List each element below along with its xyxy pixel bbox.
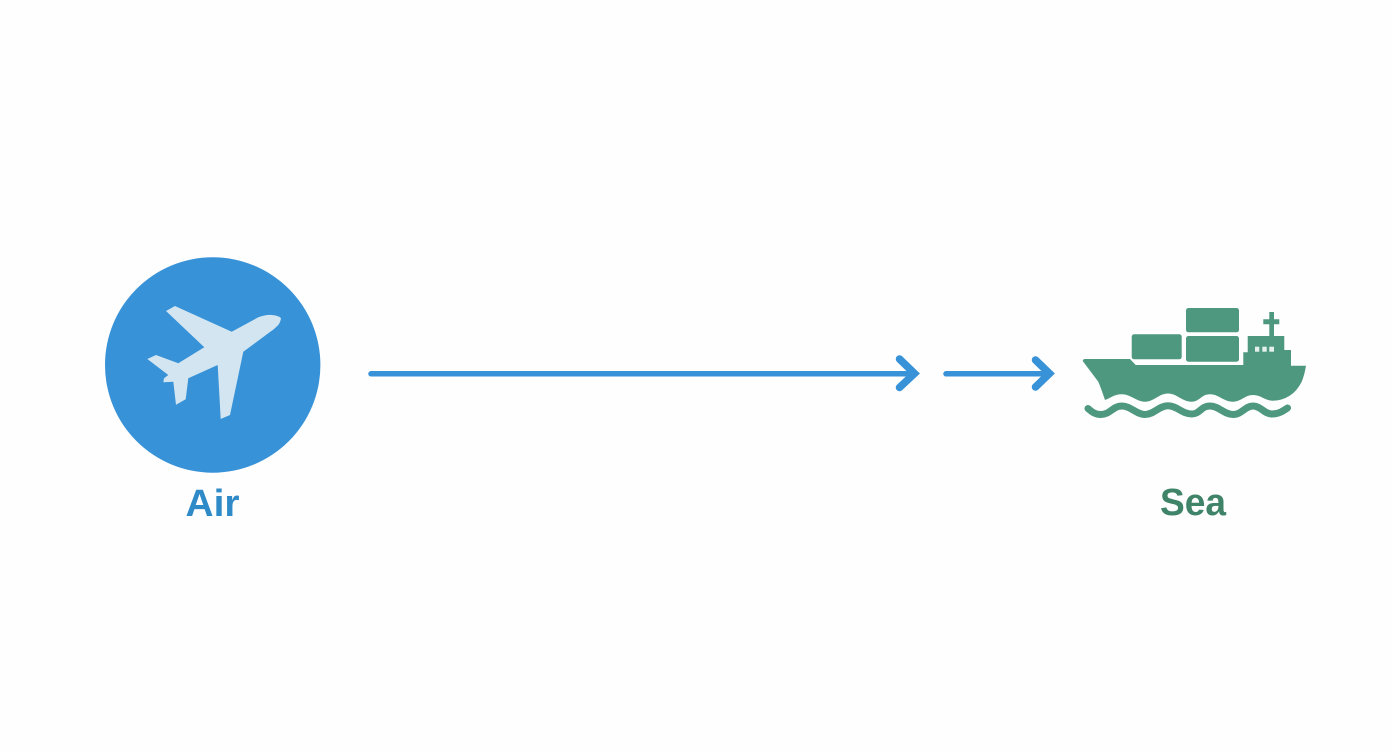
- containers: [1132, 308, 1239, 362]
- label: Air: Air: [186, 483, 240, 525]
- arrow: short blue arrow: [946, 360, 1050, 387]
- ship hull and superstructure: [1083, 312, 1306, 402]
- icon: container ship: [1083, 308, 1306, 414]
- icon: plane: [147, 306, 281, 419]
- water wave: [1088, 406, 1288, 414]
- arrow: long blue arrow: [371, 359, 914, 388]
- icon: air circle with plane: [105, 257, 320, 473]
- label: Sea: Sea: [1160, 482, 1227, 524]
- ship windows: [1255, 347, 1274, 352]
